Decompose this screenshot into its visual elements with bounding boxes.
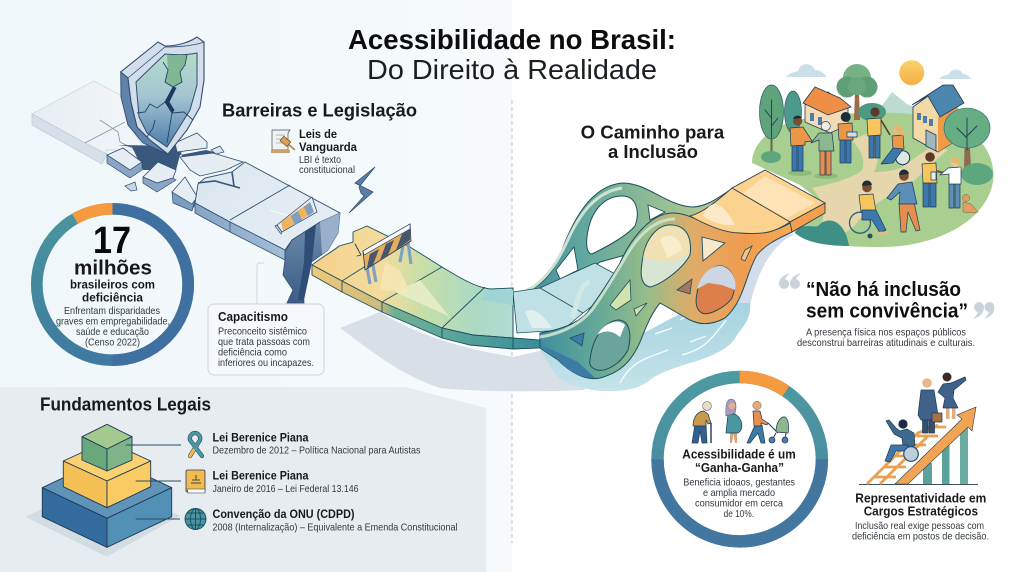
- house: blue roof: [912, 85, 964, 152]
- callout: ableism: inferiores ou incapazes.: [218, 357, 314, 369]
- icon: law scroll with gavel: [271, 130, 295, 153]
- callout: ableism: Capacitismo: [218, 310, 288, 324]
- base line: [859, 484, 978, 486]
- cliff chasm: [283, 213, 340, 303]
- item: UN convention: 2008 (Internalização) – Equivalente a Emenda Constitucional: [212, 522, 458, 534]
- pyramid of laws: [25, 424, 180, 557]
- text: win-win description: e amplia mercado: [703, 487, 775, 499]
- back ribbon of bridge: [513, 183, 760, 300]
- tree: small poplar: [784, 91, 802, 133]
- road barrier on slab: [275, 197, 317, 234]
- stat description: graves em empregabilidade,: [56, 316, 170, 328]
- back ribbon cut-out right: [648, 205, 665, 220]
- text block: vanguard laws: Leis de: [299, 129, 337, 141]
- bridge end: orange tile: [690, 170, 825, 234]
- stat description: saúde e educação: [76, 326, 149, 338]
- growth bars: [923, 425, 968, 484]
- bridge shadow: [340, 312, 585, 391]
- item: UN convention: Convenção da ONU (CDPD): [212, 509, 355, 521]
- shield side face: [121, 72, 167, 154]
- icon: opening quote mark: [779, 273, 801, 289]
- shield cracks: [137, 55, 193, 143]
- item: UN convention: [212, 509, 458, 534]
- lightning bolt: [349, 167, 375, 213]
- quote description: A presença física nos espaços públicos: [806, 327, 966, 339]
- icon: closing quote mark: [973, 302, 994, 319]
- item: Lei Berenice Piana 2016: Janeiro de 2016 – Lei Federal 13.146: [212, 483, 359, 495]
- item: Lei Berenice Piana 2016: [212, 471, 359, 495]
- icon: sun: [899, 60, 924, 85]
- stat label: deficiência: [82, 293, 144, 305]
- icon: stroller: [768, 417, 789, 443]
- bridge deck middle section: [513, 263, 617, 333]
- text: win-win description: de 10%.: [724, 508, 754, 520]
- callout: ableism: Preconceito sistêmico: [218, 326, 307, 338]
- person: woman pointing: [938, 372, 966, 419]
- fissure network: [118, 145, 232, 176]
- person: orange shirt: [788, 116, 812, 176]
- background: left half: [0, 0, 512, 572]
- quote description: [797, 327, 975, 349]
- text: representativeness: Inclusão real exige pessoas com: [855, 520, 984, 532]
- stat: 17: 17: [93, 220, 131, 262]
- divider: dashed centre line: [511, 100, 513, 543]
- person: yellow shirt with clipboard: [922, 152, 945, 207]
- title: [348, 24, 676, 85]
- person: elder green shirt: [811, 121, 838, 179]
- icon: walking parent: [747, 401, 768, 443]
- small cut-outs: [570, 237, 752, 346]
- stat description: [56, 305, 170, 348]
- callout: ableism: deficiência como: [218, 346, 287, 358]
- tree: right: [944, 108, 990, 168]
- item: Lei Berenice Piana 2012: Dezembro de 2012 – Política Nacional para Autistas: [212, 445, 420, 457]
- icon: ribbon: [190, 433, 202, 456]
- cracked slab: intact road section: [195, 162, 340, 260]
- heading: legal foundations: Fundamentos Legais: [40, 394, 211, 415]
- illustration: inclusive community: [752, 60, 993, 247]
- person: woman in wheelchair: [881, 125, 910, 165]
- heading: path to inclusion: a Inclusão: [608, 142, 698, 162]
- stat label: [70, 258, 155, 305]
- bridge deck: warm to green glass segments: [312, 226, 540, 349]
- text block: vanguard laws: Vanguarda: [299, 142, 358, 154]
- cracked slab: broken pieces: [107, 133, 243, 211]
- distant hills: [870, 92, 930, 125]
- dog: [962, 194, 978, 213]
- illustration: career ladder: [859, 372, 978, 484]
- river under bridge: [540, 233, 798, 391]
- piece: right: [180, 153, 243, 176]
- back ribbon large opening: [587, 196, 637, 254]
- piece: upper right: [175, 133, 207, 152]
- bush behind: [858, 103, 886, 121]
- person in suit: [918, 378, 942, 433]
- donut: 17 million: [37, 209, 188, 360]
- shield icon: [121, 37, 204, 154]
- cracked slab: faded back section: [32, 81, 145, 164]
- text: win-win description: Beneficia idoaos, gestantes: [683, 476, 795, 488]
- title: Do Direito à Realidade: [367, 54, 657, 85]
- panel background: legal foundations: [0, 387, 486, 572]
- back ribbon cut-out left: [556, 247, 578, 279]
- quote text: [806, 279, 968, 323]
- opening: lower left: [590, 320, 630, 370]
- item: Lei Berenice Piana 2016: Lei Berenice Piana: [212, 471, 309, 483]
- text: representativeness: deficiência em postos de decisão.: [852, 531, 989, 543]
- item: Lei Berenice Piana 2012: [212, 432, 420, 457]
- heading: path to inclusion: O Caminho para: [581, 122, 725, 142]
- text block: vanguard laws: constitucional: [299, 164, 355, 176]
- text: win-win heading: Acessibilidade é um: [682, 447, 796, 461]
- shield frame: [121, 37, 204, 154]
- tree: back: [836, 64, 878, 120]
- text: win-win description: [683, 476, 795, 520]
- shield face: [136, 53, 197, 147]
- heading: path to inclusion: [581, 122, 725, 162]
- stat label: milhões: [74, 258, 152, 280]
- person: yellow shirt: [867, 107, 890, 158]
- house: orange roof: [803, 87, 851, 133]
- callout: ableism: que trata passoas com: [218, 336, 310, 348]
- title: Acessibilidade no Brasil:: [348, 24, 676, 55]
- ground: [752, 113, 993, 247]
- growth arrow: [895, 407, 976, 484]
- bushes: [761, 151, 993, 246]
- icon: cloud left: [786, 64, 827, 77]
- stat description: (Censo 2022): [85, 336, 140, 348]
- quote text: sem convivência”: [806, 301, 968, 323]
- heading: barriers and legislation: Barreiras e Legislação: [222, 100, 417, 121]
- chips: [211, 146, 224, 154]
- piece: left: [107, 148, 142, 178]
- barrier on bridge: [363, 224, 411, 284]
- icon: pregnant woman: [726, 399, 742, 443]
- text: representativeness: [852, 491, 989, 543]
- donut: win-win: [658, 377, 822, 541]
- text: win-win description: consumidor em cerca: [695, 498, 783, 510]
- person in wheelchair: [885, 419, 918, 462]
- quote text: “Não há inclusão: [806, 279, 961, 301]
- stat label: brasileiros com: [70, 280, 155, 292]
- text: win-win heading: “Ganha-Ganha”: [695, 461, 784, 475]
- person: walking blue shirt: [887, 169, 920, 232]
- front ribbon of bridge: [540, 213, 792, 379]
- opening: large centre: [641, 225, 690, 287]
- icon: cloud right: [939, 70, 971, 79]
- opening: lower right: [696, 266, 735, 314]
- text: representativeness: Cargos Estratégicos: [864, 505, 978, 519]
- icon: globe: [185, 508, 206, 530]
- person: man in wheelchair: [850, 180, 890, 238]
- legal list: [212, 432, 458, 534]
- person: woman white shirt: [940, 157, 961, 208]
- text block: vanguard laws: [299, 129, 358, 176]
- dirt path: [812, 134, 948, 233]
- quote: [779, 273, 994, 349]
- text: win-win heading: [682, 447, 796, 475]
- ladder: [867, 425, 946, 484]
- text: representativeness: Representatividade em: [855, 491, 986, 505]
- icon: elderly person: [692, 402, 711, 443]
- text block: vanguard laws: LBI é texto: [299, 154, 341, 166]
- tree: poplar: [760, 85, 784, 152]
- leader lines: [126, 445, 181, 519]
- icon: law book: [186, 470, 205, 493]
- piece: lower: [172, 177, 198, 211]
- person: orange shirt with folder: [838, 112, 857, 163]
- piece: centre: [143, 162, 176, 192]
- quote description: desconstrui barreiras atitudinais e culturais.: [797, 337, 975, 349]
- stat description: Enfrentam disparidades: [64, 305, 160, 317]
- callout: ableism: [208, 263, 324, 375]
- item: Lei Berenice Piana 2012: Lei Berenice Piana: [212, 432, 309, 444]
- background: right half: [512, 0, 1024, 572]
